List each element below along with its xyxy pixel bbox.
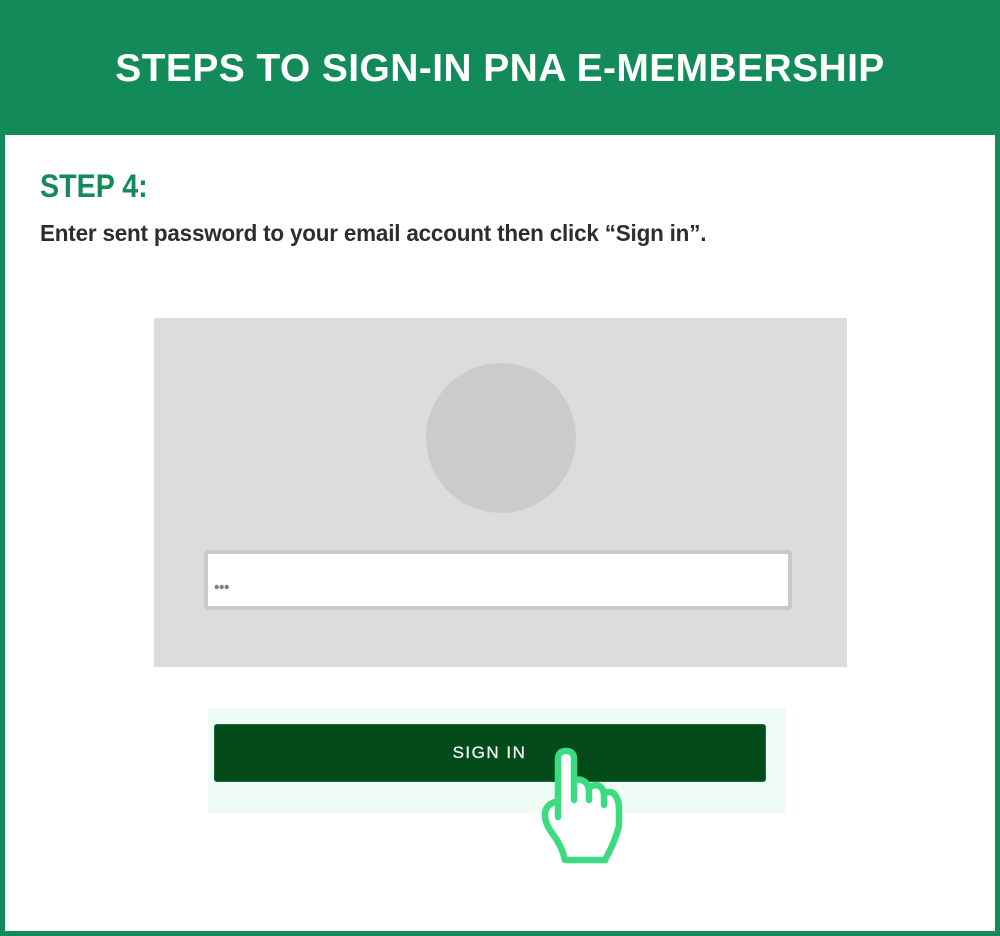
panel: button background: [208, 708, 786, 813]
avatar placeholder: [426, 363, 576, 513]
title: STEPS TO SIGN-IN PNA E-MEMBERSHIP: [115, 47, 885, 90]
icon: pointing hand: [542, 748, 622, 864]
title banner: [0, 0, 1000, 135]
sign in button: [214, 724, 766, 782]
step instruction: Enter sent password to your email account then click “Sign in”.: [40, 220, 706, 246]
step heading: STEP 4:: [40, 168, 148, 204]
button label: SIGN IN: [453, 743, 526, 762]
panel: sign-in form: [154, 318, 847, 667]
password field: [204, 550, 792, 610]
password dots: [214, 584, 229, 590]
